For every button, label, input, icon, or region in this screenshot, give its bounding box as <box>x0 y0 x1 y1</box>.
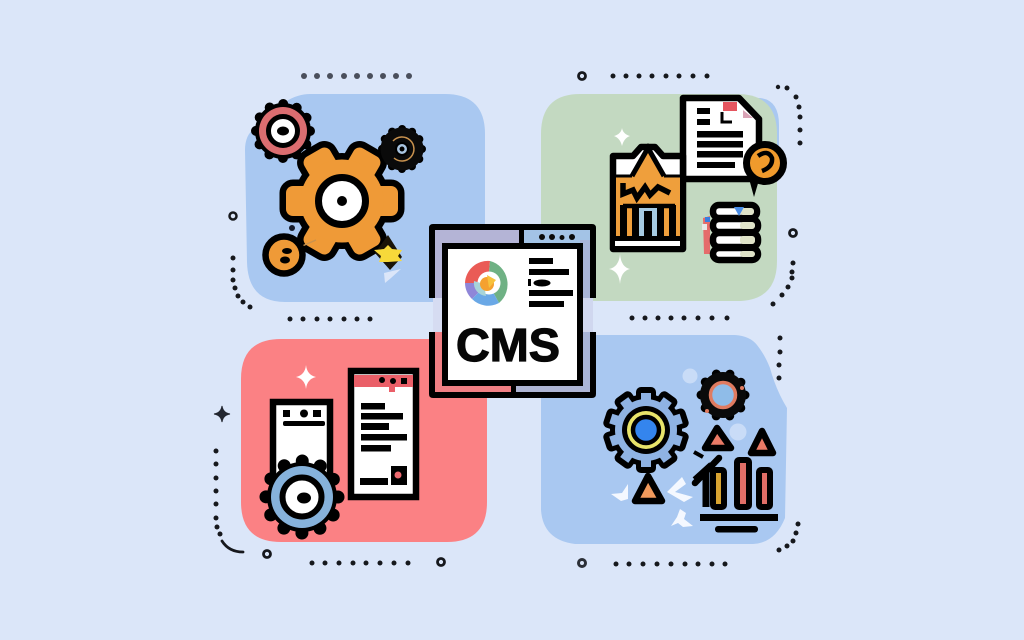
dots: top-left row <box>301 73 412 79</box>
icon: document <box>683 98 759 179</box>
icon: dark sparkle <box>214 406 230 422</box>
icons: soft light circles <box>682 368 746 440</box>
window control dots <box>539 234 575 240</box>
icon: white sparkle in red panel <box>296 365 316 389</box>
panel: bottom-right blue <box>541 335 787 544</box>
icon: triangle markers <box>635 428 773 501</box>
window frame strips <box>433 228 593 396</box>
icon: large blue gear <box>606 390 686 470</box>
icon: left small window <box>273 402 330 492</box>
icon: orange speech bubble <box>746 144 784 197</box>
document card <box>445 246 580 383</box>
icon: white sparkles in green panel <box>609 128 630 284</box>
heading: CMS: CMS <box>456 319 560 371</box>
dots: bottom-left decoration <box>214 448 444 566</box>
dots: below top-left panel and left arc <box>230 212 372 322</box>
icon: red gear <box>255 103 311 159</box>
chart: bar chart icon <box>694 452 778 532</box>
icon: tall document window <box>351 371 416 497</box>
text lines <box>528 258 573 307</box>
icon: small orange gear <box>700 372 746 418</box>
panel: top-left blue <box>245 94 485 302</box>
window outline <box>429 224 596 398</box>
panel: bottom-left red <box>241 339 487 542</box>
icon: building <box>613 147 683 249</box>
dots: bottom-right decoration <box>578 336 800 566</box>
icon: colorful logo <box>465 261 508 306</box>
panel: top-right green <box>541 94 779 301</box>
icon: orange circle node <box>266 225 316 274</box>
icon: main orange gear <box>286 145 398 257</box>
icon: yellow star <box>374 235 402 283</box>
icon: dark gear <box>380 128 424 170</box>
center CMS window <box>429 224 596 398</box>
icon: database stack <box>702 205 758 260</box>
icon: blue gear <box>266 461 338 533</box>
dots: top-right decoration <box>578 72 802 320</box>
icon: white scattered shapes <box>611 477 693 527</box>
